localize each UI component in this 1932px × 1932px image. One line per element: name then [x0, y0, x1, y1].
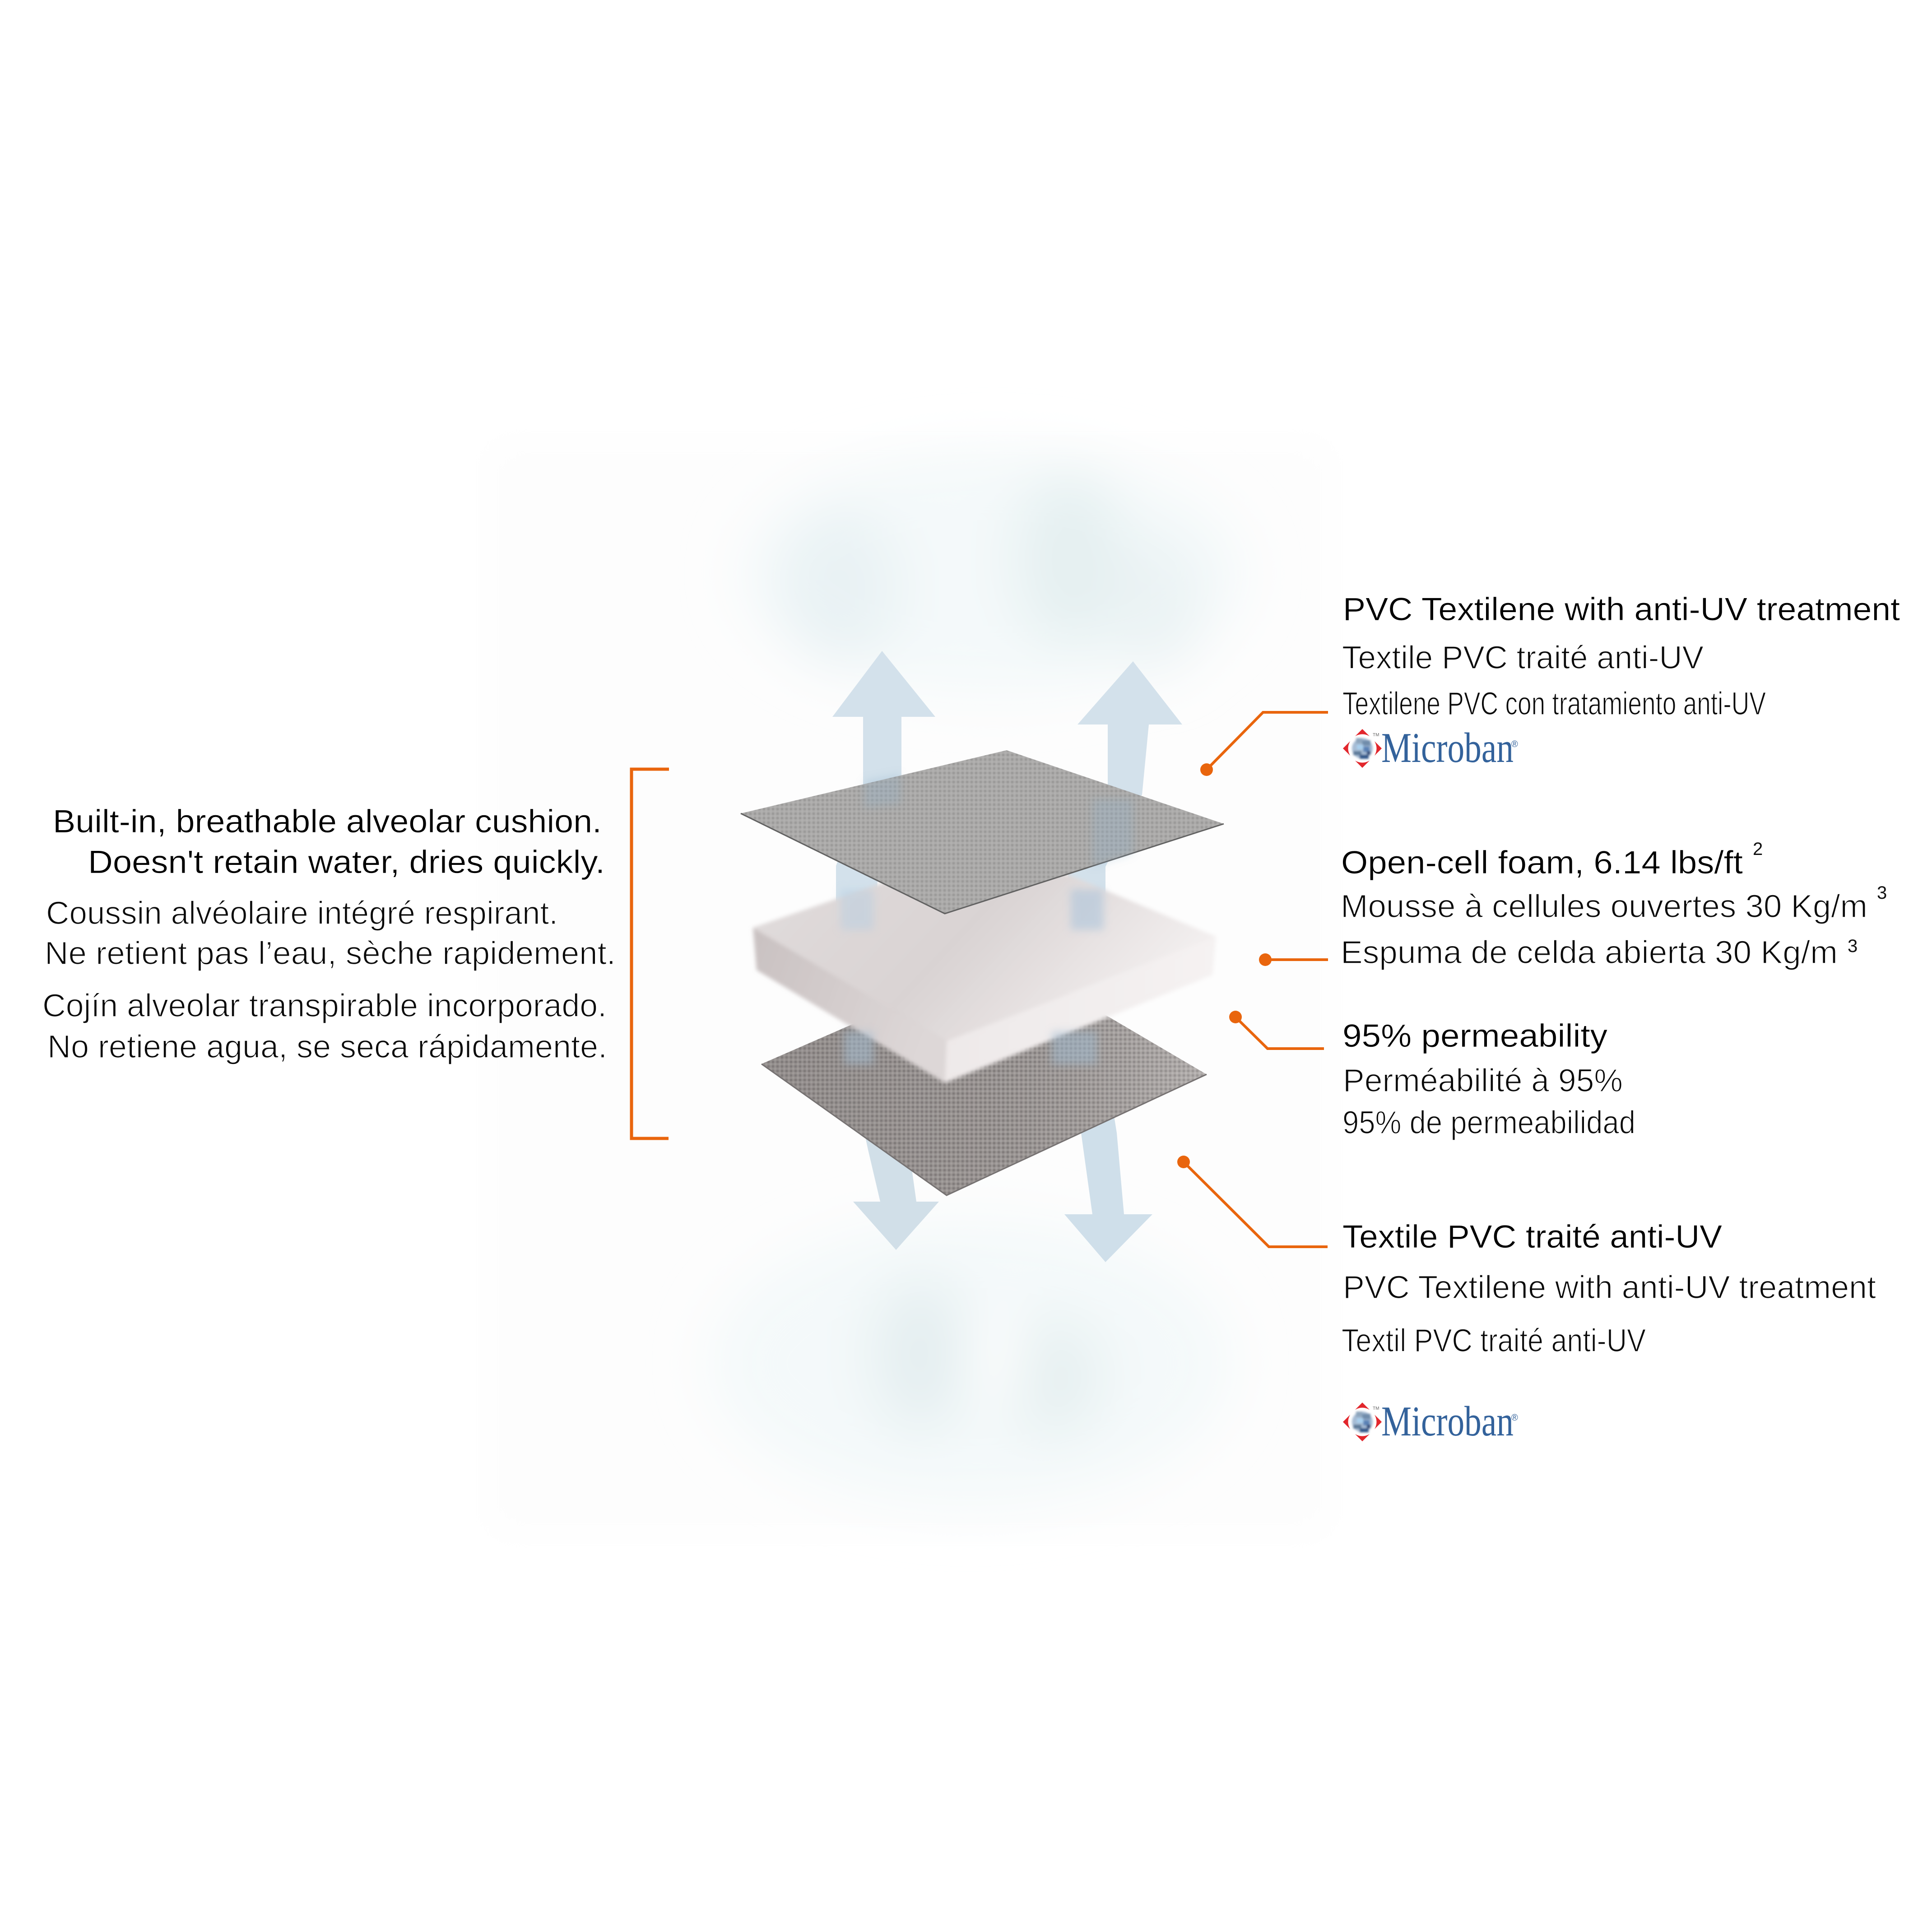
logo: Microban top: Microban — [1381, 724, 1514, 771]
bracket: cushion layers — [632, 769, 669, 1138]
arrow tints through foam and sheets — [841, 889, 1104, 1064]
text block: bottom textile — [1342, 1219, 1876, 1359]
leader line: bottom textile — [1177, 1156, 1328, 1247]
foam left side — [753, 928, 947, 1083]
logo: Microban bottom: ® — [1511, 1413, 1518, 1423]
foam block — [753, 844, 1216, 1083]
text block: permeability: 95% permeability — [1342, 1018, 1608, 1054]
text block: permeability — [1342, 1018, 1635, 1141]
mist cloud: bottom — [709, 1219, 1232, 1508]
text block: foam: Open-cell foam, 6.14 lbs/ft — [1341, 845, 1743, 881]
bottom textile sheet — [762, 957, 1207, 1195]
text block: bottom textile: Textile PVC traité anti-UV — [1342, 1219, 1723, 1255]
text block: cushion description — [42, 804, 616, 1065]
text block: cushion description: Ne retient pas l’eau, sèche rapidement. — [45, 936, 616, 971]
text block: permeability: Perméabilité à 95% — [1343, 1063, 1623, 1099]
logo: Microban bottom: Microban — [1381, 1398, 1514, 1445]
logo: Microban bottom — [1343, 1398, 1518, 1445]
text block: cushion description: Doesn't retain water, dries quickly. — [88, 845, 605, 880]
text block: cushion description: Coussin alvéolaire intégré respirant. — [46, 896, 558, 931]
arrow tint on top sheet — [864, 774, 1133, 867]
top textile sheet — [741, 750, 1224, 914]
logo: Microban top: ® — [1511, 739, 1518, 749]
arrow: lower right — [1047, 1028, 1152, 1262]
leader line: permeability — [1229, 1011, 1324, 1049]
text block: permeability: 95% de permeabilidad — [1342, 1105, 1635, 1141]
text block: top textile: Textilene PVC con tratamiento anti-UV — [1342, 686, 1766, 722]
background haze panel — [488, 442, 1332, 1535]
text block: top textile — [1342, 592, 1900, 722]
leader line: foam — [1259, 953, 1328, 966]
logo: Microban top — [1343, 724, 1518, 771]
text block: foam: 3 — [1877, 883, 1887, 903]
text block: bottom textile: Textil PVC traité anti-UV — [1342, 1323, 1646, 1359]
logo: Microban bottom: TM — [1373, 1406, 1379, 1411]
text block: cushion description: No retiene agua, se seca rápidamente. — [47, 1029, 607, 1065]
text block: foam: 2 — [1753, 839, 1763, 859]
text block: top textile: PVC Textilene with anti-UV treatment — [1343, 592, 1900, 627]
foam right side — [945, 937, 1216, 1083]
mist cloud: top — [740, 451, 1246, 695]
text block: bottom textile: PVC Textilene with anti-UV treatment — [1343, 1270, 1876, 1305]
text block: foam: Mousse à cellules ouvertes 30 Kg/m — [1341, 889, 1867, 924]
text block: top textile: Textile PVC traité anti-UV — [1342, 640, 1704, 676]
logo: Microban top: TM — [1373, 733, 1379, 738]
text block: foam — [1341, 839, 1887, 971]
text block: cushion description: Built-in, breathable alveolar cushion. — [53, 804, 602, 840]
text block: foam: Espuma de celda abierta 30 Kg/m — [1341, 935, 1838, 971]
text block: foam: 3 — [1848, 936, 1858, 956]
text block: cushion description: Cojín alveolar transpirable incorporado. — [42, 988, 607, 1024]
arrow: upper left — [832, 651, 935, 933]
arrow: upper right — [1068, 661, 1182, 933]
foam top face — [753, 844, 1216, 1041]
leader line: top textile — [1200, 712, 1328, 776]
arrow: lower left — [842, 1028, 939, 1250]
